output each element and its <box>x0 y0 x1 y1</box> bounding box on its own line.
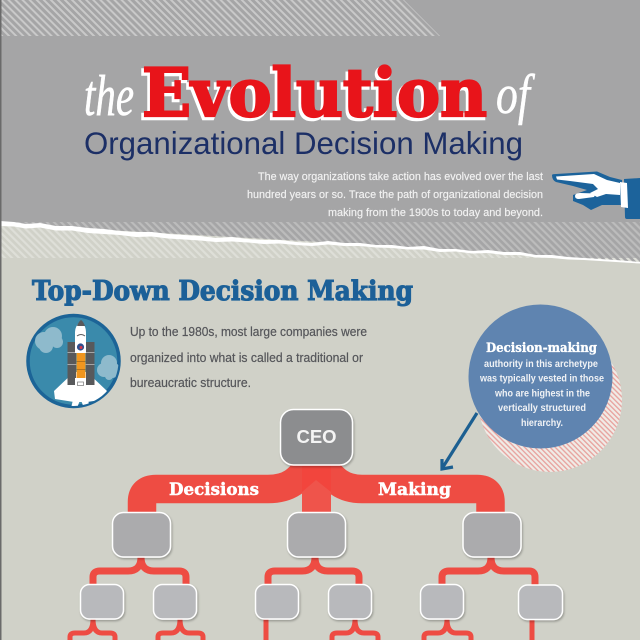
org chart <box>70 410 562 640</box>
connector: level 2 right branch <box>442 557 535 585</box>
title word: Evolution (white offset): Evolution <box>140 56 485 134</box>
connector: level 2 left branch <box>93 557 186 585</box>
callout body: was typically vested in those <box>479 374 604 384</box>
section heading: Top-Down Decision Making <box>32 276 413 307</box>
callout body: vertically structured <box>498 403 586 414</box>
intro text <box>130 325 367 390</box>
rocket boosters <box>68 342 76 385</box>
connector: level 3 branches <box>70 619 532 640</box>
level 2 boxes <box>112 512 521 557</box>
lower section background <box>0 224 640 640</box>
callout hatched shadow circle <box>478 328 622 472</box>
intro text: organized into what is called a traditional or <box>130 351 363 365</box>
title <box>84 54 536 134</box>
stripes above torn edge <box>0 222 640 264</box>
rocket tail <box>72 378 89 406</box>
stripes below torn edge <box>0 224 640 263</box>
callout body <box>479 359 604 429</box>
title word: of: of <box>496 64 536 126</box>
level 3 boxes <box>80 584 562 620</box>
connector: CEO right band <box>321 464 490 514</box>
band label: Making: Making <box>378 480 451 500</box>
intro paragraph: hundred years or so. Trace the path of organizational decision <box>247 189 543 201</box>
top stripe band <box>0 0 440 36</box>
box: CEO: CEO <box>296 426 337 447</box>
torn paper edge <box>0 221 640 264</box>
subtitle: Organizational Decision Making <box>84 125 523 161</box>
callout body: authority in this archetype <box>484 359 598 370</box>
title word: Evolution: Evolution <box>142 54 487 132</box>
band label: Decisions: Decisions <box>169 480 259 500</box>
intro paragraph: making from the 1900s to today and beyond. <box>328 207 543 219</box>
rocket fuel tank <box>76 353 86 378</box>
header background <box>0 0 640 264</box>
icon: pointing hand <box>552 172 640 219</box>
icon: rocket badge <box>28 316 120 408</box>
icon: right cloud <box>97 355 120 380</box>
rocket wings <box>54 372 107 402</box>
callout heading: Decision-making <box>486 341 597 356</box>
intro paragraph: The way organizations take action has evolved over the last <box>258 171 544 183</box>
left page edge <box>0 0 2 640</box>
arrow from callout to chart <box>442 413 477 469</box>
callout circle <box>468 304 612 448</box>
callout body: who are highest in the <box>494 388 590 400</box>
box: CEO <box>280 410 352 465</box>
connector: level 2 middle branch <box>268 557 359 585</box>
connector: CEO left band <box>142 464 311 514</box>
intro text: bureaucratic structure. <box>130 376 251 390</box>
rocket logo <box>77 343 84 351</box>
intro paragraph <box>247 171 544 219</box>
connector: CEO centre <box>302 464 331 514</box>
title word: the: the <box>84 63 134 128</box>
rocket body <box>75 321 86 353</box>
intro text: Up to the 1980s, most large companies were <box>130 325 367 339</box>
icon: left cloud <box>35 327 63 353</box>
callout <box>468 304 622 472</box>
callout body: hierarchy. <box>521 418 563 429</box>
